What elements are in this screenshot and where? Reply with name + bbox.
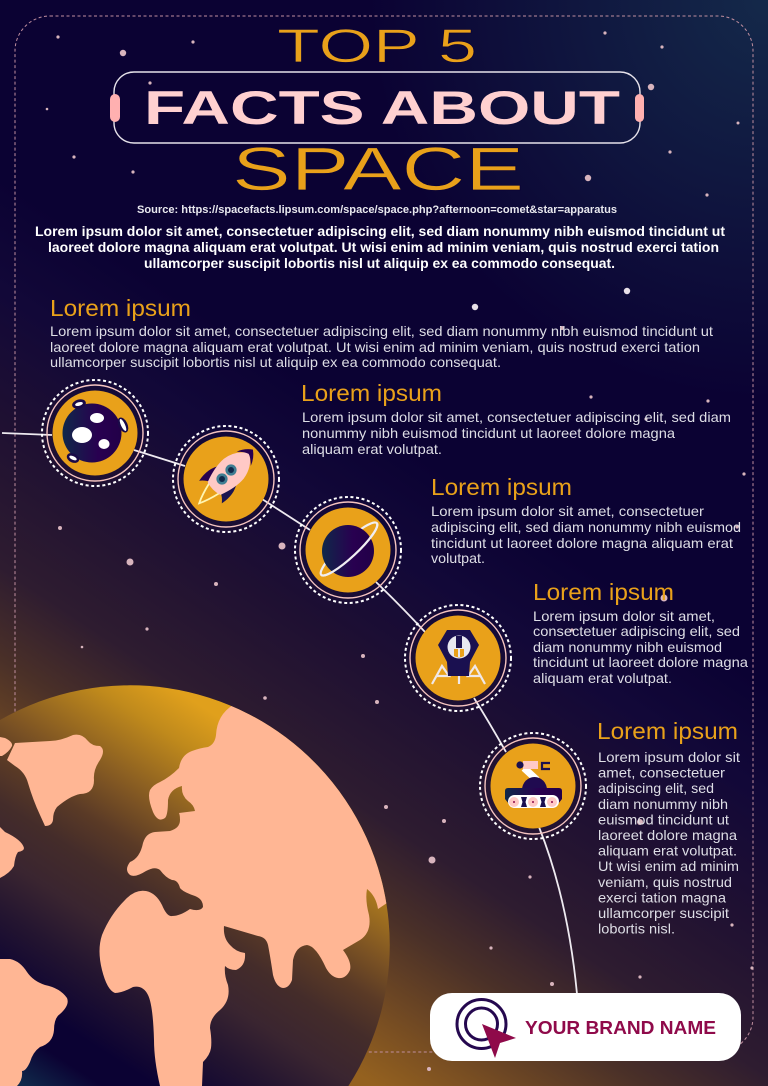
section 5 text: ullamcorper suscipit <box>598 905 729 921</box>
connecting path <box>2 433 577 994</box>
section 2 text: Lorem ipsum <box>301 380 442 406</box>
section 2 text: nonummy nibh euismod tincidunt ut laoreet dolore magna <box>302 425 675 441</box>
section 5 text: diam nonummy nibh <box>598 796 728 812</box>
intro paragraph: laoreet dolore magna aliquam erat volutpat. Ut wisi enim ad minim veniam, quis nostrud exerci tation <box>48 240 719 255</box>
section 2 text: Lorem ipsum dolor sit amet, consectetuer adipiscing elit, sed diam <box>302 409 731 425</box>
section 5 text: laoreet dolore magna <box>598 827 737 843</box>
title: space: SPACE <box>232 135 524 203</box>
icon: rover <box>480 733 586 839</box>
section 5 text: euismod tincidunt ut <box>598 811 729 827</box>
intro paragraph: Lorem ipsum dolor sit amet, consectetuer adipiscing elit, sed diam nonummy nibh euismod tincidunt ut <box>35 224 726 239</box>
section 4 text: tincidunt ut laoreet dolore magna <box>533 654 748 670</box>
section 3 text: tincidunt ut laoreet dolore magna aliquam erat <box>431 535 733 551</box>
section 4 text: Lorem ipsum <box>533 579 674 605</box>
brand card <box>430 993 741 1061</box>
section 3 text <box>431 474 741 566</box>
section 3 text: volutpat. <box>431 550 485 566</box>
section 4 text: aliquam erat volutpat. <box>533 670 672 686</box>
icon: moon <box>42 380 148 486</box>
section 5 text: Lorem ipsum dolor sit <box>598 749 740 765</box>
icon: lunar lander <box>405 605 511 711</box>
section 5 text: veniam, quis nostrud <box>598 874 732 890</box>
section 2 text: aliquam erat volutpat. <box>302 441 442 457</box>
section 1 text: laoreet dolore magna aliquam erat volutpat. Ut wisi enim ad minim veniam, quis nostrud exerci tation <box>50 339 700 355</box>
icon: ringed planet <box>295 497 401 603</box>
intro paragraph <box>35 224 726 271</box>
section 5 text: lobortis nisl. <box>598 921 675 937</box>
intro paragraph: ullamcorper suscipit lobortis nisl ut aliquip ex ea commodo consequat. <box>144 256 615 271</box>
icon: brand logo <box>457 1000 516 1058</box>
section 1 text: Lorem ipsum <box>50 295 191 321</box>
section 5 text: Ut wisi enim ad minim <box>598 858 739 874</box>
section 3 text: Lorem ipsum dolor sit amet, consectetuer <box>431 503 704 519</box>
section 4 text: diam nonummy nibh euismod <box>533 639 722 655</box>
section 4 text: consectetuer adipiscing elit, sed <box>533 623 740 639</box>
earth <box>0 685 390 1086</box>
section 5 text: adipiscing elit, sed <box>598 780 714 796</box>
section 4 text: Lorem ipsum dolor sit amet, <box>533 608 715 624</box>
section 5 text: exerci tation magna <box>598 889 726 905</box>
section 2 text <box>301 380 731 457</box>
section 5 text <box>597 718 740 937</box>
section 1 text: Lorem ipsum dolor sit amet, consectetuer adipiscing elit, sed diam nonummy nibh euismod tincidunt ut <box>50 323 713 339</box>
section 5 text: Lorem ipsum <box>597 718 738 744</box>
title badge: FACTS ABOUT <box>144 81 620 134</box>
section 3 text: adipiscing elit, sed diam nonummy nibh euismod <box>431 519 741 535</box>
section 1 text: ullamcorper suscipit lobortis nisl ut aliquip ex ea commodo consequat. <box>50 354 501 370</box>
section 4 text <box>533 579 748 686</box>
brand card: YOUR BRAND NAME <box>525 1018 716 1038</box>
section 3 text: Lorem ipsum <box>431 474 572 500</box>
section 1 text <box>50 295 713 370</box>
source line: Source: https://spacefacts.lipsum.com/space/space.php?afternoon=comet&star=apparatus <box>137 204 617 216</box>
title: top 5: TOP 5 <box>277 19 477 72</box>
section 5 text: amet, consectetuer <box>598 765 725 781</box>
icon: rocket <box>173 426 279 532</box>
title badge <box>110 72 644 143</box>
section 5 text: aliquam erat volutpat. <box>598 843 737 859</box>
